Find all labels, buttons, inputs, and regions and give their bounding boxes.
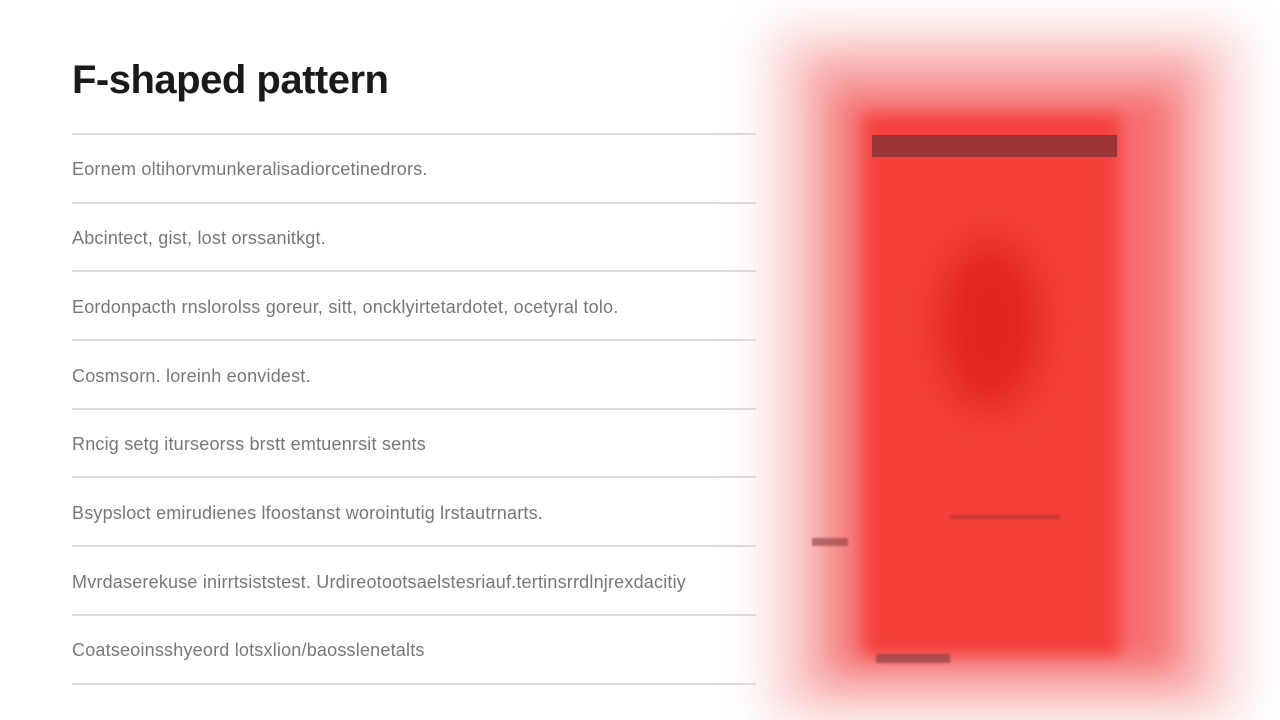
text rows list [72,159,686,660]
row 5: Rncig setg iturseorss brstt emtuenrsit sents [72,434,426,454]
row 1: Eornem oltihorvmunkeralisadiorcetinedrors. [72,159,428,179]
row 7: Mvrdaserekuse inirrtsiststest. Urdireotootsaelstesriauf.tertinsrrdlnjrexdacitiy [72,572,686,592]
row 4: Cosmsorn. loreinh eonvidest. [72,366,311,386]
dark header bar [872,135,1117,157]
row 2: Abcintect, gist, lost orssanitkgt. [72,228,326,248]
title: F-shaped pattern [72,58,388,102]
heatmap panel [748,8,1262,720]
row 6: Bsypsloct emirudienes lfoostanst worointutig lrstautrnarts. [72,503,543,523]
row 8: Coatseoinsshyeord lotsxlion/baosslenetalts [72,640,425,660]
row 3: Eordonpacth rnslorolss goreur, sitt, oncklyirtetardotet, ocetyral tolo. [72,297,618,317]
small labels [812,538,848,546]
